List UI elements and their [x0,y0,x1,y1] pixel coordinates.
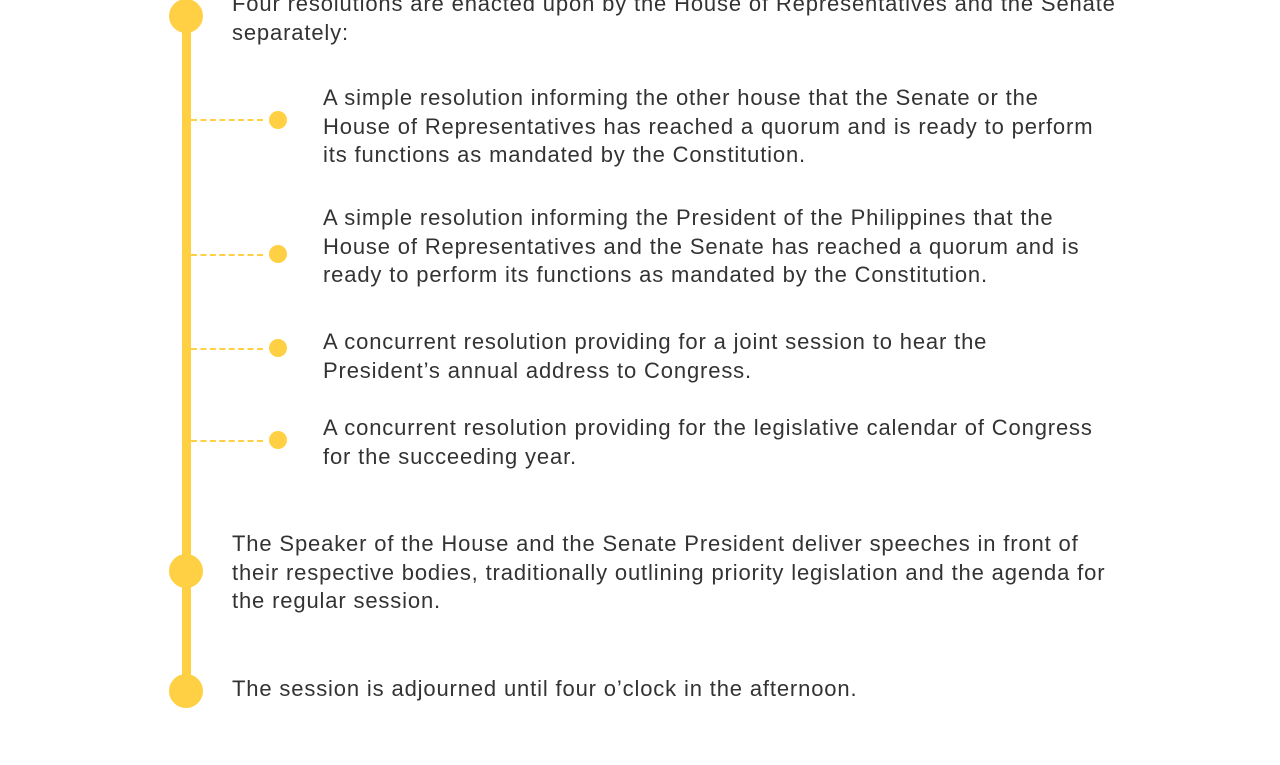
text: four resolutions [232,0,1116,44]
text: resolution 3: President’s annual address to Congress. [323,358,752,382]
text: resolution 3 [323,329,987,382]
connector 4 [191,440,263,442]
text: speeches: The Speaker of the House and the Senate President deliver speeches in front of [232,531,1079,556]
text: resolution 1: A simple resolution informing the other house that the Senate or the [323,85,1039,110]
text: resolution 2: ready to perform its functions as mandated by the Constitution. [323,262,988,287]
dot 4 [269,431,287,449]
text: resolution 4: for the succeeding year. [323,444,577,468]
timeline node: adjourned [169,674,203,708]
text: speeches: their respective bodies, traditionally outlining priority legislation and the agenda for [232,560,1105,584]
text: speeches: the regular session. [232,588,441,613]
dot 1 [269,111,287,129]
text: resolution 2: House of Representatives and the Senate has reached a quorum and is [323,234,1080,258]
connector 3 [191,348,263,350]
text: resolution 1 [323,85,1093,167]
text: resolution 1: its functions as mandated by the Constitution. [323,142,806,167]
dot 2 [269,245,287,263]
dot 3 [269,339,287,357]
text: adjourned: The session is adjourned until four o’clock in the afternoon. [232,676,857,701]
timeline node: four resolutions [169,0,203,33]
text: resolution 2 [323,205,1080,287]
text: speeches [232,531,1105,613]
connector 1 [191,119,263,121]
text: four resolutions: separately: [232,20,349,44]
text: resolution 3: A concurrent resolution providing for a joint session to hear the [323,329,987,354]
timeline line [182,10,191,690]
text: resolution 1: House of Representatives has reached a quorum and is ready to perform [323,114,1093,138]
text: resolution 2: A simple resolution informing the President of the Philippines that the [323,205,1054,230]
text: resolution 4: A concurrent resolution providing for the legislative calendar of Congress [323,415,1093,440]
timeline node: speeches [169,554,203,588]
connector 2 [191,254,263,256]
text: resolution 4 [323,415,1093,468]
